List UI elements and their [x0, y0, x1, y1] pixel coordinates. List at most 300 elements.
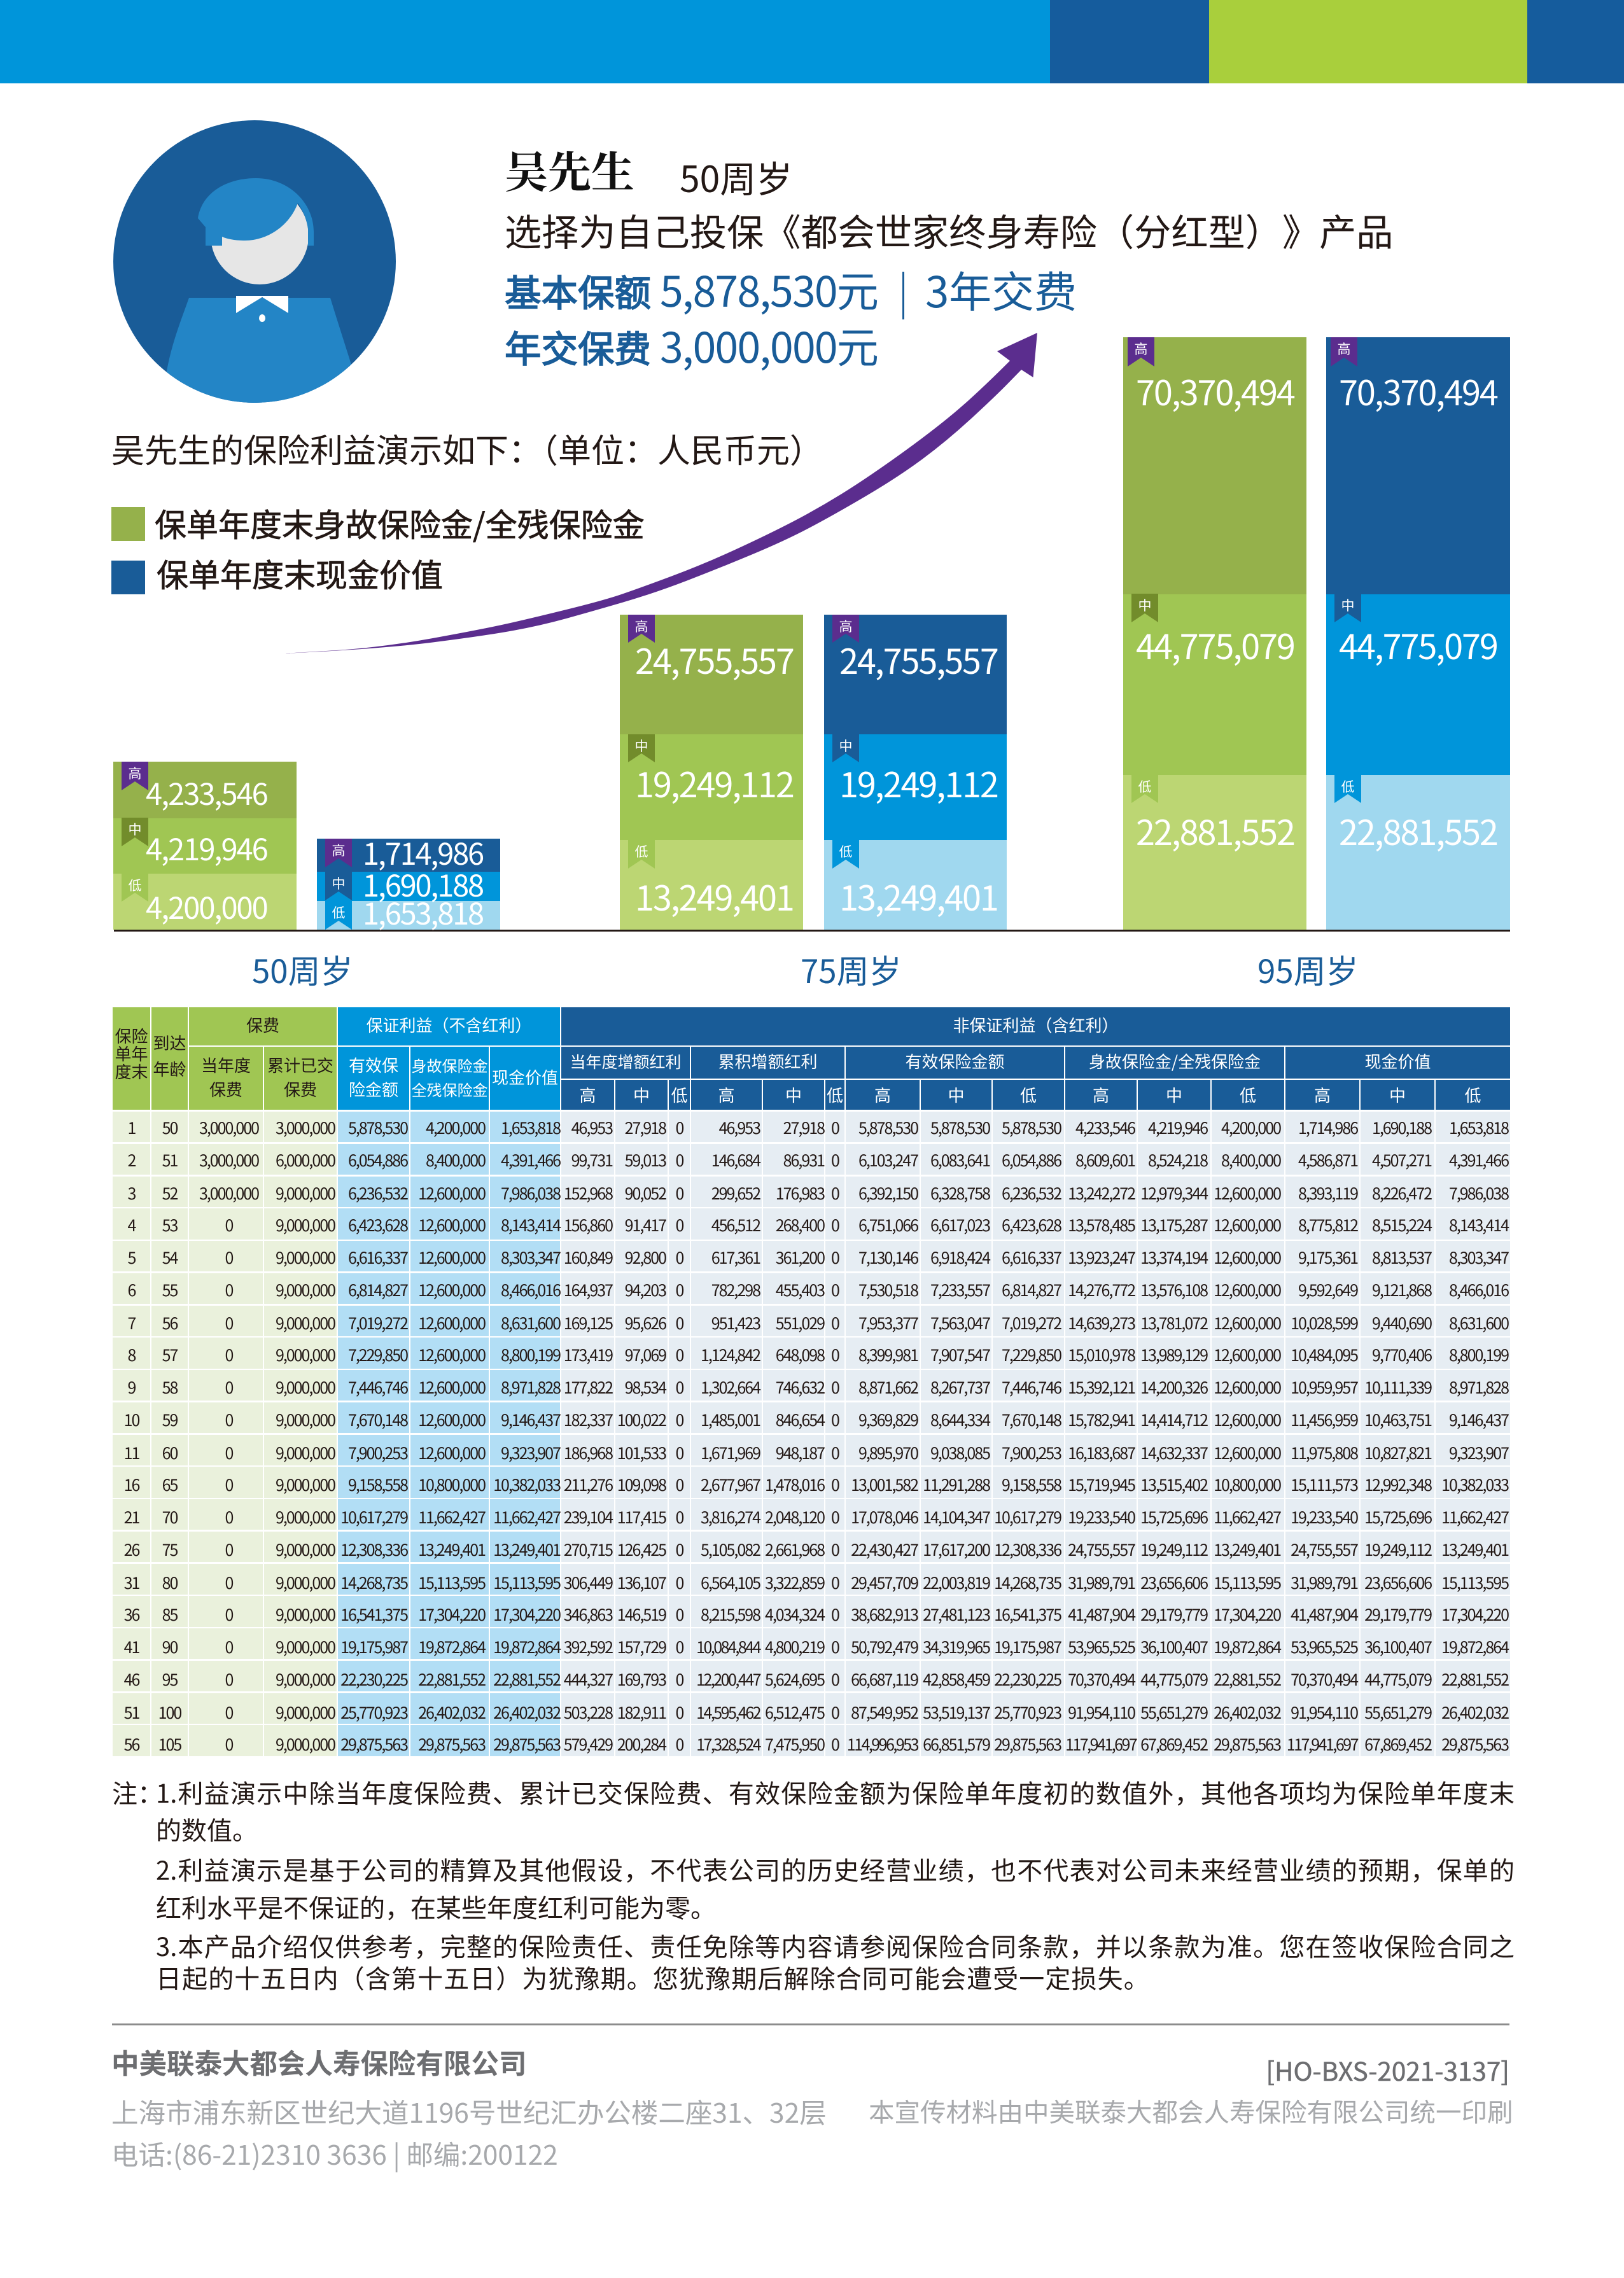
row: year 11: 9,323,907 — [501, 1441, 560, 1464]
row: year 36: 16,541,375 — [340, 1603, 407, 1626]
row: year 16: 16 — [124, 1473, 139, 1496]
row: year 16: 9,000,000 — [276, 1473, 335, 1496]
row: year 6: 12,600,000 — [1214, 1278, 1280, 1301]
header: cumulative premium — [264, 1047, 337, 1110]
row: year 1: 27,918 — [625, 1116, 666, 1139]
row: year 26: 22,430,427 — [851, 1538, 918, 1561]
row: year 7: 0 — [676, 1311, 683, 1334]
row: year 9: 12,600,000 — [418, 1376, 485, 1399]
row: year 26: 19,249,112 — [1140, 1538, 1207, 1561]
header: scenario labels: 高 — [874, 1083, 891, 1106]
row: year 36: 0 — [831, 1603, 839, 1626]
row: year 2: 3,000,000 — [199, 1149, 258, 1171]
row: year 1: 50 — [162, 1116, 177, 1139]
row: year 31: 31,989,791 — [1068, 1570, 1135, 1593]
header: cumulative premium: 保费 — [284, 1077, 317, 1101]
row: year 56: 29,875,563 — [418, 1733, 485, 1756]
ribbon: low: 低 — [129, 876, 141, 895]
legend — [111, 500, 645, 596]
header: cash value group — [1285, 1047, 1510, 1079]
bar: age 50 cash value — [317, 830, 500, 933]
row: year 46: 22,230,225 — [994, 1668, 1061, 1691]
row: year 56: 56 — [124, 1733, 139, 1756]
row: year 5: 617,361 — [711, 1246, 760, 1269]
row: year 10 — [113, 1402, 1510, 1433]
row: year 6: 94,203 — [625, 1278, 666, 1301]
row: year 8: 7,907,547 — [930, 1343, 990, 1366]
row: year 4: 12,600,000 — [418, 1213, 485, 1236]
print statement: 本宣传材料由中美联泰大都会人寿保险有限公司统一印刷 — [869, 2092, 1513, 2129]
row: year 26: 19,249,112 — [1364, 1538, 1431, 1561]
row: year 10: 12,600,000 — [418, 1408, 485, 1431]
header: scenario labels: 中 — [1166, 1083, 1182, 1106]
row: year 4: 91,417 — [625, 1213, 666, 1236]
row: year 2: 4,586,871 — [1298, 1149, 1357, 1171]
row: year 56: 29,875,563 — [1214, 1733, 1280, 1756]
header: accumulated bonus: 累积增额红利 — [718, 1049, 817, 1073]
row: year 6: 55 — [162, 1278, 177, 1301]
row: year 3: 152,968 — [564, 1181, 612, 1204]
row: year 21: 10,617,279 — [340, 1506, 407, 1528]
row: year 4: 268,400 — [776, 1213, 824, 1236]
row: year 2: 8,524,218 — [1148, 1149, 1207, 1171]
row: year 16: 0 — [676, 1473, 683, 1496]
row: year 6: 14,276,772 — [1068, 1278, 1135, 1301]
row: year 36: 4,034,324 — [765, 1603, 824, 1626]
row: year 6: 8,466,016 — [501, 1278, 560, 1301]
company address: 上海市浦东新区世纪大道1196号世纪汇办公楼二座31、32层 — [111, 2092, 827, 2131]
row: year 10: 10,463,751 — [1364, 1408, 1431, 1431]
row: year 2: 4,391,466 — [1449, 1149, 1508, 1171]
row: year 51: 25,770,923 — [994, 1700, 1061, 1723]
row: year 56: 9,000,000 — [276, 1733, 335, 1756]
row: year 8: 8,800,199 — [1449, 1343, 1508, 1366]
legend label: green: 保单年度末身故保险金/全残保险金 — [155, 500, 645, 546]
row: year 3: 3,000,000 — [199, 1181, 258, 1204]
row: year 21: 9,000,000 — [276, 1506, 335, 1528]
value: low: 1,653,818 — [363, 890, 483, 933]
row: year 3: 176,983 — [776, 1181, 824, 1204]
header: scenario labels: 低 — [1464, 1083, 1481, 1106]
row: year 1: 5,878,530 — [930, 1116, 990, 1139]
row: year 36: 36 — [124, 1603, 139, 1626]
row: year 10: 9,000,000 — [276, 1408, 335, 1431]
row: year 1: 3,000,000 — [276, 1116, 335, 1139]
row: year 11: 0 — [225, 1441, 232, 1464]
row: year 1: 46,953 — [571, 1116, 612, 1139]
row: year 4: 9,000,000 — [276, 1213, 335, 1236]
ribbon: high — [628, 615, 655, 643]
row: year 8: 9,770,406 — [1372, 1343, 1431, 1366]
row: year 8: 9,000,000 — [276, 1343, 335, 1366]
row: year 5: 6,918,424 — [930, 1246, 990, 1269]
header: death benefit: 全残保险金 — [411, 1078, 487, 1100]
header: scenario labels: 低 — [671, 1083, 687, 1106]
row: year 11: 186,968 — [564, 1441, 612, 1464]
row: year 31: 29,457,709 — [851, 1570, 918, 1593]
row: year 10: 9,146,437 — [1449, 1408, 1508, 1431]
row: year 9: 10,111,339 — [1364, 1376, 1431, 1399]
row: year 7: 9,440,690 — [1372, 1311, 1431, 1334]
row: year 11: 101,533 — [617, 1441, 666, 1464]
legend swatch: green — [111, 507, 145, 541]
row: year 56: 29,875,563 — [340, 1733, 407, 1756]
row: year 4: 6,751,066 — [858, 1213, 918, 1236]
row: year 46: 66,687,119 — [851, 1668, 918, 1691]
row: year 21: 17,078,046 — [851, 1506, 918, 1528]
row: year 51: 503,228 — [564, 1700, 612, 1723]
row: year 36: 85 — [162, 1603, 177, 1626]
row: year 5 — [113, 1241, 1510, 1271]
row: year 51: 0 — [831, 1700, 839, 1723]
ribbon: mid: 中 — [129, 820, 141, 839]
row: year 1: 5,878,530 — [858, 1116, 918, 1139]
row: year 26: 12,308,336 — [340, 1538, 407, 1561]
row: year 41: 0 — [676, 1635, 683, 1658]
row: year 8: 1,124,842 — [701, 1343, 760, 1366]
bar: age 95 cash value — [1326, 337, 1510, 930]
row: year 9: 0 — [676, 1376, 683, 1399]
ribbon: mid — [628, 734, 655, 762]
row: year 10: 15,782,941 — [1068, 1408, 1135, 1431]
row: year 36: 17,304,220 — [1214, 1603, 1280, 1626]
row: year 16: 13,001,582 — [851, 1473, 918, 1496]
row: year 46: 0 — [225, 1668, 232, 1691]
ribbon: high — [325, 839, 352, 867]
customer age: 50周岁 — [680, 151, 792, 203]
row: year 4: 8,143,414 — [501, 1213, 560, 1236]
row: year 16: 0 — [225, 1473, 232, 1496]
note 3: 3.本产品介绍仅供参考，完整的保险责任、责任免除等内容请参阅保险合同条款，并以条款为准。您在签收保险合同之 — [156, 1927, 1515, 1964]
row: year 2: 6,054,886 — [348, 1149, 407, 1171]
row: year 9: 177,822 — [564, 1376, 612, 1399]
row: year 11: 0 — [676, 1441, 683, 1464]
row: year 36 — [113, 1596, 1510, 1627]
bar: age 95 death benefit — [1123, 337, 1306, 930]
row: year 10: 1,485,001 — [701, 1408, 760, 1431]
row: year 9: 746,632 — [776, 1376, 824, 1399]
row: year 46: 44,775,079 — [1364, 1668, 1431, 1691]
header: non-guaranteed benefits: 非保证利益（含红利） — [953, 1013, 1119, 1037]
row: year 56: 579,429 — [564, 1733, 612, 1756]
row: year 11: 9,038,085 — [930, 1441, 990, 1464]
header: age: 到达 — [153, 1031, 186, 1054]
row: year 21: 117,415 — [617, 1506, 666, 1528]
row: year 8: 173,419 — [564, 1343, 612, 1366]
ribbon: high — [832, 615, 859, 643]
value: mid: 44,775,079 — [1136, 619, 1294, 669]
row: year 26: 0 — [225, 1538, 232, 1561]
top colour bar — [0, 0, 1624, 83]
row: year 7: 10,028,599 — [1291, 1311, 1357, 1334]
row: year 1: 0 — [676, 1116, 683, 1139]
row: year 51: 51 — [124, 1700, 139, 1723]
row: year 31: 15,113,595 — [1441, 1570, 1508, 1593]
header: scenario labels: 低 — [1020, 1083, 1037, 1106]
row: year 16: 15,111,573 — [1291, 1473, 1357, 1496]
row: year 1: 4,200,000 — [1221, 1116, 1280, 1139]
row: year 10: 8,644,334 — [930, 1408, 990, 1431]
row: year 7: 9,000,000 — [276, 1311, 335, 1334]
row: year 4: 4 — [128, 1213, 135, 1236]
row: year 3: 7,986,038 — [1449, 1181, 1508, 1204]
row: year 2: 6,054,886 — [1002, 1149, 1061, 1171]
row: year 5: 5 — [128, 1246, 135, 1269]
row: year 56: 117,941,697 — [1065, 1733, 1136, 1756]
row: year 16: 10,382,033 — [1441, 1473, 1508, 1496]
ribbon: mid — [122, 818, 148, 846]
header: current premium — [189, 1047, 263, 1110]
row: year 41: 34,319,965 — [923, 1635, 990, 1658]
company name: 中美联泰大都会人寿保险有限公司 — [111, 2042, 527, 2082]
row: year 41: 4,800,219 — [765, 1635, 824, 1658]
row: year 3: 12,600,000 — [418, 1181, 485, 1204]
row: year 16: 11,291,288 — [923, 1473, 990, 1496]
row: year 6: 164,937 — [564, 1278, 612, 1301]
row: year 7: 951,423 — [711, 1311, 760, 1334]
row: year 7 — [113, 1306, 1510, 1336]
row: year 6: 6,814,827 — [1002, 1278, 1061, 1301]
row: year 4: 13,578,485 — [1068, 1213, 1135, 1236]
row: year 41: 19,872,864 — [1441, 1635, 1508, 1658]
row: year 21: 19,233,540 — [1291, 1506, 1357, 1528]
row: year 36: 27,481,123 — [923, 1603, 990, 1626]
row: year 3: 3 — [128, 1181, 135, 1204]
axis label: 95: 95周岁 — [1257, 946, 1359, 993]
label: annual premium: 年交保费 — [505, 319, 651, 373]
row: year 2: 59,013 — [625, 1149, 666, 1171]
row: year 31: 22,003,819 — [923, 1570, 990, 1593]
row: year 8: 97,069 — [625, 1343, 666, 1366]
row: year 11: 9,000,000 — [276, 1441, 335, 1464]
row: year 31: 14,268,735 — [994, 1570, 1061, 1593]
ribbon: mid: 中 — [839, 736, 853, 755]
row: year 56: 66,851,579 — [923, 1733, 990, 1756]
row: year 10: 11,456,959 — [1291, 1408, 1357, 1431]
row: year 26: 13,249,401 — [493, 1538, 560, 1561]
row: year 46: 12,200,447 — [696, 1668, 760, 1691]
row: year 41: 19,872,864 — [493, 1635, 560, 1658]
row: year 3: 12,600,000 — [1214, 1181, 1280, 1204]
row: year 5: 0 — [831, 1246, 839, 1269]
row: year 10: 9,146,437 — [501, 1408, 560, 1431]
row: year 10: 846,654 — [776, 1408, 824, 1431]
header: premium: 保费 — [246, 1013, 279, 1037]
row: year 3: 0 — [676, 1181, 683, 1204]
row: year 10: 0 — [676, 1408, 683, 1431]
row: year 7: 8,631,600 — [1449, 1311, 1508, 1334]
value: mid: 1,690,188 — [363, 862, 483, 905]
document code: [HO-BXS-2021-3137] — [1266, 2051, 1509, 2088]
ribbon: low: 低 — [1138, 777, 1152, 796]
row: year 16: 65 — [162, 1473, 177, 1496]
row: year 10: 182,337 — [564, 1408, 612, 1431]
header: annual bonus — [561, 1047, 690, 1079]
row: year 2: 8,609,601 — [1075, 1149, 1135, 1171]
row: year 1: 1,653,818 — [501, 1116, 560, 1139]
arrow: rising benefit — [286, 333, 1037, 653]
row: year 5: 92,800 — [625, 1246, 666, 1269]
row: year 41: 19,872,864 — [418, 1635, 485, 1658]
row: year 1: 1,714,986 — [1298, 1116, 1357, 1139]
row: year 26: 13,249,401 — [1214, 1538, 1280, 1561]
value: high: 4,233,546 — [146, 770, 267, 814]
row: year 26: 75 — [162, 1538, 177, 1561]
row: year 41: 19,872,864 — [1214, 1635, 1280, 1658]
row: year 10: 100,022 — [617, 1408, 666, 1431]
row: year 7: 0 — [831, 1311, 839, 1334]
row: year 6: 9,592,649 — [1298, 1278, 1357, 1301]
row: year 21: 0 — [225, 1506, 232, 1528]
row: year 2 — [113, 1144, 1510, 1175]
row: year 11: 9,895,970 — [858, 1441, 918, 1464]
row: year 7: 0 — [225, 1311, 232, 1334]
row: year 16: 211,276 — [564, 1473, 612, 1496]
row: year 36: 0 — [225, 1603, 232, 1626]
row: year 36: 146,519 — [617, 1603, 666, 1626]
row: year 56 — [113, 1725, 1510, 1756]
row: year 3: 8,393,119 — [1298, 1181, 1357, 1204]
header: scenario labels — [561, 1080, 1510, 1110]
row: year 26: 9,000,000 — [276, 1538, 335, 1561]
value: low: 4,200,000 — [146, 884, 267, 928]
row: year 1: 4,219,946 — [1148, 1116, 1207, 1139]
ribbon: high: 高 — [1338, 339, 1350, 358]
benefit table — [113, 1007, 1510, 1756]
row: year 56: 29,875,563 — [1441, 1733, 1508, 1756]
value: high: 70,370,494 — [1136, 365, 1294, 416]
row: year 4: 6,617,023 — [930, 1213, 990, 1236]
header: non-guaranteed benefits — [561, 1007, 1510, 1045]
header: scenario labels: 高 — [579, 1083, 596, 1106]
row: year 8: 0 — [676, 1343, 683, 1366]
row: year 31: 15,113,595 — [418, 1570, 485, 1593]
row: year 11: 14,632,337 — [1140, 1441, 1207, 1464]
row: year 8: 10,484,095 — [1291, 1343, 1357, 1366]
ribbon: low: 低 — [1341, 777, 1354, 796]
row: year 16: 13,515,402 — [1140, 1473, 1207, 1496]
row: year 8: 7,229,850 — [1002, 1343, 1061, 1366]
row: year 3: 52 — [162, 1181, 177, 1204]
row: year 56: 0 — [831, 1733, 839, 1756]
row: year 5: 6,616,337 — [348, 1246, 407, 1269]
row: year 31: 15,113,595 — [493, 1570, 560, 1593]
icon: customer avatar — [113, 120, 396, 403]
ribbon: low — [325, 901, 352, 930]
row: year 7: 12,600,000 — [418, 1311, 485, 1334]
row: year 2: 146,684 — [711, 1149, 760, 1171]
row: year 2: 6,083,641 — [930, 1149, 990, 1171]
row: year 3: 6,236,532 — [348, 1181, 407, 1204]
header: cash value — [490, 1047, 560, 1110]
header: death benefit: 身故保险金 — [411, 1054, 487, 1075]
row: year 6: 0 — [225, 1278, 232, 1301]
row: year 2: 4,507,271 — [1372, 1149, 1431, 1171]
row: year 46: 22,230,225 — [340, 1668, 407, 1691]
header: annual bonus: 当年度增额红利 — [570, 1050, 681, 1073]
row: year 3 — [113, 1177, 1510, 1207]
header: death benefit — [410, 1047, 489, 1110]
header: effective sum group: 有效保险金额 — [905, 1049, 1004, 1073]
row: year 11: 16,183,687 — [1068, 1441, 1135, 1464]
row: year 46: 46 — [124, 1668, 139, 1691]
row: year 31: 31,989,791 — [1291, 1570, 1357, 1593]
row: year 11: 1,671,969 — [701, 1441, 760, 1464]
row: year 41: 41 — [124, 1635, 139, 1658]
row: year 7: 8,631,600 — [501, 1311, 560, 1334]
ribbon: mid — [1131, 594, 1158, 622]
header: scenario labels: 低 — [827, 1083, 843, 1106]
row: year 6: 455,403 — [776, 1278, 824, 1301]
basic sum insured — [505, 258, 1077, 320]
ribbon: mid: 中 — [1341, 596, 1354, 615]
row: year 26: 0 — [831, 1538, 839, 1561]
row: year 8: 12,600,000 — [418, 1343, 485, 1366]
row: year 36: 17,304,220 — [1441, 1603, 1508, 1626]
header: age: 年龄 — [153, 1057, 186, 1080]
value: high: 1,714,986 — [363, 830, 483, 874]
header: policy year: 单年 — [115, 1041, 148, 1065]
row: year 36: 17,304,220 — [418, 1603, 485, 1626]
value: pay period: 3年交费 — [925, 258, 1077, 320]
row: year 5: 6,616,337 — [1002, 1246, 1061, 1269]
row: year 7: 12,600,000 — [1214, 1311, 1280, 1334]
header: scenario labels: 高 — [1314, 1083, 1331, 1106]
value: low: 22,881,552 — [1339, 805, 1497, 855]
row: year 36: 8,215,598 — [701, 1603, 760, 1626]
row: year 4: 8,775,812 — [1298, 1213, 1357, 1236]
row: year 41: 53,965,525 — [1068, 1635, 1135, 1658]
row: year 11: 11,975,808 — [1291, 1441, 1357, 1464]
row: year 4: 12,600,000 — [1214, 1213, 1280, 1236]
row: year 36: 38,682,913 — [851, 1603, 918, 1626]
note marker: 注： — [112, 1773, 163, 1810]
row: year 21: 10,617,279 — [994, 1506, 1061, 1528]
row: year 6: 13,576,108 — [1140, 1278, 1207, 1301]
row: year 1: 1,690,188 — [1372, 1116, 1431, 1139]
row: year 46: 70,370,494 — [1291, 1668, 1357, 1691]
notes — [112, 1779, 1515, 1992]
row: year 56: 200,284 — [617, 1733, 666, 1756]
header: death benefit group — [1065, 1047, 1284, 1079]
bar: age 50 death benefit — [113, 762, 297, 930]
row: year 56: 67,869,452 — [1140, 1733, 1207, 1756]
row: year 1: 46,953 — [719, 1116, 760, 1139]
row: year 2: 6,103,247 — [858, 1149, 918, 1171]
row: year 31: 31 — [124, 1570, 139, 1593]
row: year 7: 7,563,047 — [930, 1311, 990, 1334]
row: year 16: 2,677,967 — [701, 1473, 760, 1496]
row: year 6: 8,466,016 — [1449, 1278, 1508, 1301]
row: year 26: 12,308,336 — [994, 1538, 1061, 1561]
row: year 5: 13,923,247 — [1068, 1246, 1135, 1269]
header: policy year: 保险 — [115, 1023, 148, 1047]
row: year 11: 60 — [162, 1441, 177, 1464]
row: year 9: 14,200,326 — [1140, 1376, 1207, 1399]
row: year 36: 41,487,904 — [1291, 1603, 1357, 1626]
row: year 51: 6,512,475 — [765, 1700, 824, 1723]
row: year 51: 0 — [676, 1700, 683, 1723]
row: year 3: 7,986,038 — [501, 1181, 560, 1204]
header: cash value: 现金价值 — [492, 1065, 558, 1088]
row: year 46: 42,858,459 — [923, 1668, 990, 1691]
row: year 56: 105 — [158, 1733, 181, 1756]
header: scenario labels: 中 — [633, 1083, 650, 1106]
row: year 5: 8,813,537 — [1372, 1246, 1431, 1269]
row: year 46: 70,370,494 — [1068, 1668, 1135, 1691]
row: year 36: 29,179,779 — [1364, 1603, 1431, 1626]
value: basic sum: 5,878,530元 — [660, 258, 879, 319]
